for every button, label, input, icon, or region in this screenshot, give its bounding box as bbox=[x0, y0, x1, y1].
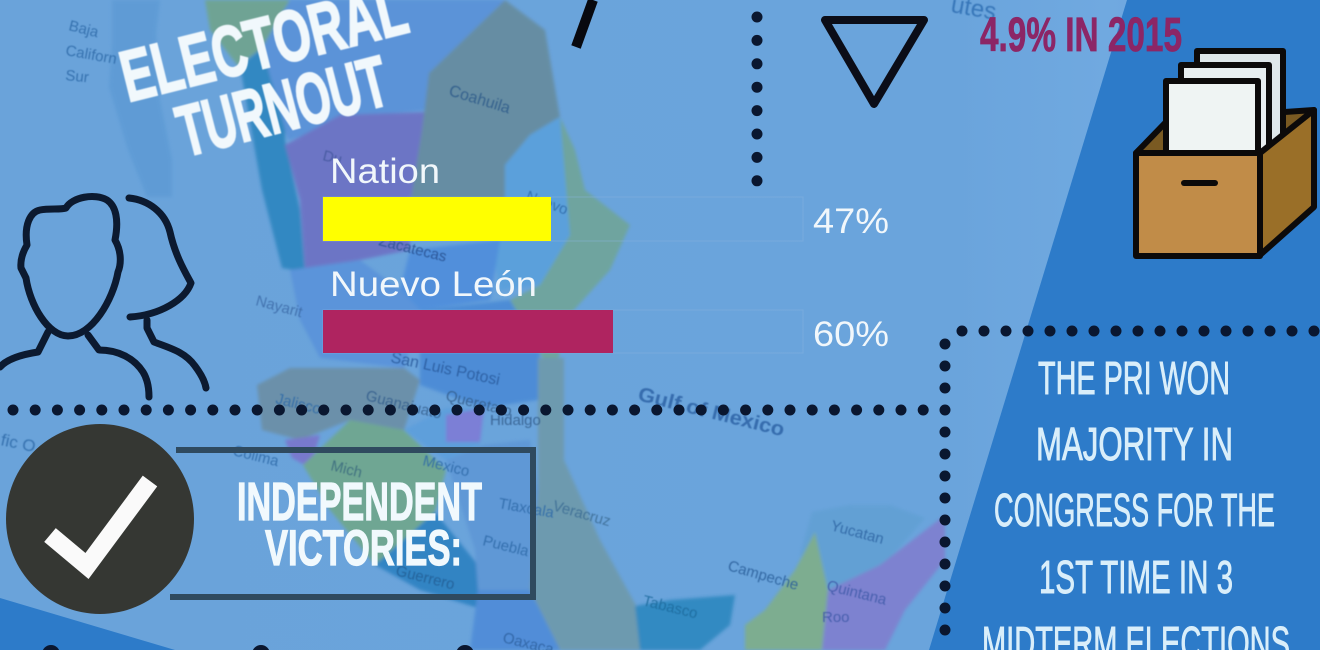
heading: electoral turnout: TURNOUT bbox=[169, 41, 396, 172]
map labels: Nayarit bbox=[254, 292, 305, 321]
heading: independent victories bbox=[237, 472, 482, 576]
map labels: Zacatecas bbox=[377, 232, 448, 266]
map of Mexico bbox=[109, 0, 945, 650]
map labels: Mich bbox=[329, 457, 364, 482]
dotted divider horizontal bbox=[13, 404, 945, 416]
dotted divider top vertical bbox=[752, 17, 762, 181]
banner frame bbox=[170, 450, 533, 597]
heading: independent victories: INDEPENDENT bbox=[237, 472, 482, 532]
dark blue corner bottom left bbox=[0, 598, 175, 650]
label: Nation: Nation bbox=[330, 152, 440, 191]
icon: people bbox=[0, 197, 206, 397]
heading: electoral turnout bbox=[113, 0, 415, 172]
map labels: fic O bbox=[0, 430, 37, 456]
icon: ballot box bbox=[1136, 51, 1314, 256]
map labels: Quintana bbox=[825, 577, 889, 609]
icon: down triangle bbox=[825, 20, 924, 104]
bar track lines bbox=[323, 197, 803, 353]
map labels: Mexico bbox=[421, 452, 471, 480]
map labels: Nuevo bbox=[524, 188, 570, 219]
map labels: Baja bbox=[67, 17, 101, 41]
panel text: PRI majority: MAJORITY IN bbox=[1036, 418, 1233, 470]
map labels: Guerrero bbox=[394, 562, 456, 593]
map labels: Queretaro bbox=[444, 387, 514, 420]
panel text: PRI majority bbox=[982, 352, 1290, 650]
bar: Nuevo León bbox=[323, 310, 613, 353]
map labels: Jalisco bbox=[274, 390, 323, 418]
map labels: Coahuila bbox=[447, 83, 512, 117]
map labels: Roo bbox=[822, 609, 850, 626]
map labels: Yucatan bbox=[829, 517, 886, 548]
map labels: Tabasco bbox=[641, 592, 699, 622]
map labels: Tlaxcala bbox=[497, 495, 556, 522]
partial dots bottom bbox=[42, 645, 474, 650]
value: 47%: 47% bbox=[813, 202, 889, 241]
dotted frame right panel bbox=[945, 331, 1320, 650]
dark blue panel right bbox=[929, 0, 1320, 650]
arrow stroke fragment bbox=[576, 0, 593, 47]
map labels bbox=[0, 0, 998, 650]
map labels: Colima bbox=[231, 442, 281, 470]
map labels: Sur bbox=[65, 67, 90, 86]
map labels: Du bbox=[321, 147, 344, 169]
map labels: Puebla bbox=[481, 532, 531, 560]
map labels: Guanajuato bbox=[364, 387, 443, 423]
map labels: San Luis Potosi bbox=[389, 349, 501, 389]
map labels: Hidalgo bbox=[490, 412, 541, 429]
icon: check mark badge bbox=[6, 424, 194, 614]
bar: Nation bbox=[323, 197, 551, 241]
map labels: Veracruz bbox=[551, 498, 612, 530]
stat: 4.9% in 2015: 4.9% IN 2015 bbox=[980, 9, 1182, 62]
map labels: Campeche bbox=[726, 558, 800, 594]
value: 60%: 60% bbox=[813, 315, 889, 354]
label: Nuevo León: Nuevo León bbox=[330, 265, 537, 304]
heading: independent victories: VICTORIES: bbox=[265, 520, 462, 576]
bar chart: turnout bbox=[323, 152, 889, 354]
map labels: Californ bbox=[64, 42, 118, 68]
map labels: Gulf of Mexico bbox=[636, 384, 787, 441]
